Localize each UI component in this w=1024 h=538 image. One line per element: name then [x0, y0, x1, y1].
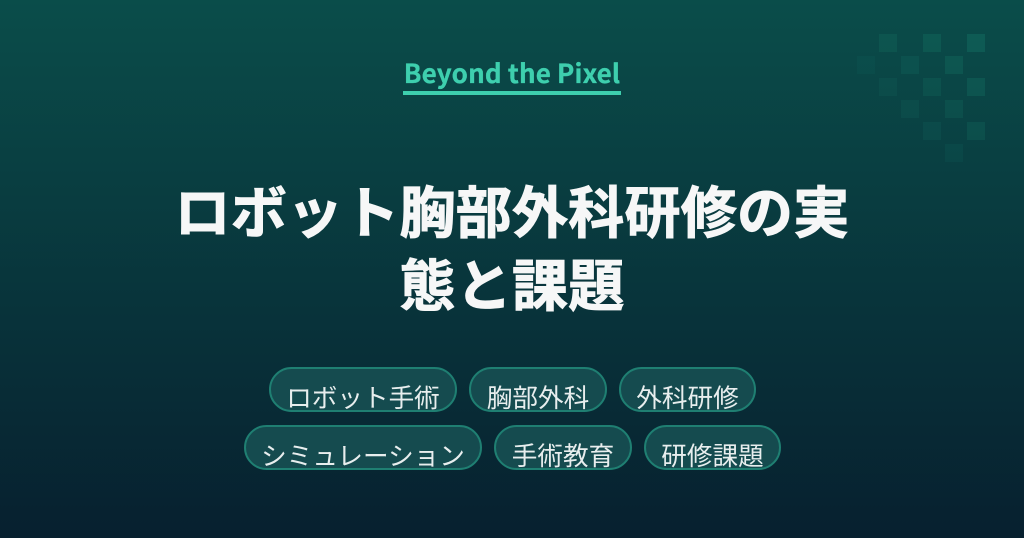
tag: 手術教育: 手術教育	[512, 436, 614, 472]
tag: 手術教育	[494, 424, 632, 470]
title: ロボット胸部外科研修の実	[174, 169, 850, 250]
tag: 外科研修: 外科研修	[636, 378, 739, 415]
tag: シミュレーション	[244, 424, 482, 470]
tags	[244, 367, 781, 472]
tag: ロボット手術	[269, 367, 457, 412]
tag: ロボット手術: ロボット手術	[286, 378, 440, 415]
title: 態と課題	[400, 242, 624, 323]
tag: 胸部外科	[469, 367, 607, 412]
tag: シミュレーション: シミュレーション	[261, 436, 465, 472]
brand label: Beyond the Pixel: Beyond the Pixel	[404, 54, 620, 91]
tag: 外科研修	[619, 367, 756, 412]
title	[174, 169, 850, 323]
decorative pixel grid	[879, 34, 985, 140]
tag: 胸部外科: 胸部外科	[487, 378, 589, 415]
tag: 研修課題: 研修課題	[661, 436, 764, 472]
tag: 研修課題	[644, 424, 781, 470]
